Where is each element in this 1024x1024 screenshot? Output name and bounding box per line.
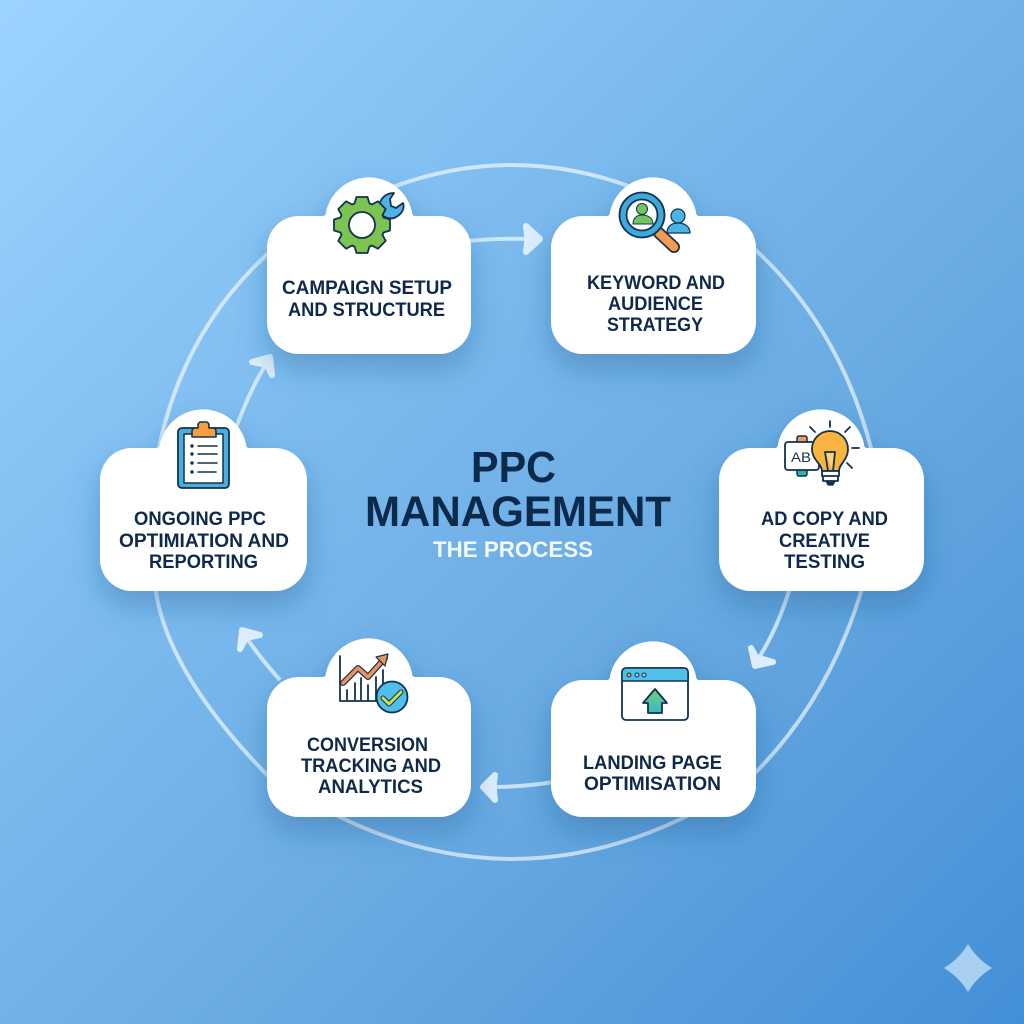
label: AUDIENCE [608, 293, 703, 315]
label: STRATEGY [607, 314, 703, 336]
icon: browser window with up arrow [622, 668, 688, 720]
title [365, 443, 671, 536]
card shape [267, 177, 471, 354]
card shape [551, 641, 756, 817]
panel: ongoing optimisation [100, 409, 307, 591]
label: ANALYTICS [318, 776, 423, 798]
panel: landing page [551, 641, 756, 817]
card shape [719, 409, 924, 591]
label: KEYWORD AND [587, 272, 725, 294]
icon: sparkle [944, 944, 992, 992]
label [119, 508, 289, 573]
label: CONVERSION [307, 734, 428, 756]
label [282, 277, 452, 321]
panel: keyword and audience [551, 177, 756, 354]
label: OPTIMISATION [584, 773, 721, 795]
arrow: ad copy to landing page [751, 588, 790, 666]
label: ONGOING PPC [134, 508, 266, 530]
process ring [155, 165, 872, 859]
arrow: setup to keyword [468, 226, 540, 252]
arrow: landing page to conversion [483, 775, 554, 800]
label [301, 734, 441, 798]
title: PPC [471, 443, 556, 492]
subtitle: THE PROCESS [433, 537, 593, 562]
label: AD COPY AND [761, 508, 888, 530]
panel: ad copy [719, 409, 924, 591]
panel: campaign setup [267, 177, 471, 354]
arrow: conversion to ongoing [240, 630, 280, 680]
icon: gear and wrench [334, 193, 404, 253]
icon: clipboard checklist [178, 422, 229, 488]
label: AND STRUCTURE [288, 299, 445, 321]
icon: growth chart with check [340, 654, 408, 712]
label: LANDING PAGE [583, 752, 722, 774]
label [761, 508, 888, 573]
card shape [100, 409, 307, 591]
panel: conversion tracking [267, 638, 471, 817]
label: OPTIMIATION AND [119, 530, 289, 552]
icon: AB test and light bulb: AB [791, 450, 811, 465]
label: CREATIVE [779, 530, 870, 552]
label [583, 752, 722, 795]
label: REPORTING [149, 551, 258, 573]
label [587, 272, 725, 336]
label: TRACKING AND [301, 755, 441, 777]
icon: magnifier and audience [620, 192, 690, 247]
icon: AB test and light bulb [785, 421, 859, 485]
label: CAMPAIGN SETUP [282, 277, 452, 299]
title: MANAGEMENT [365, 488, 671, 536]
card shape [551, 177, 756, 354]
card shape [267, 638, 471, 817]
label: TESTING [784, 551, 865, 573]
arrow: ongoing to setup [236, 357, 272, 428]
